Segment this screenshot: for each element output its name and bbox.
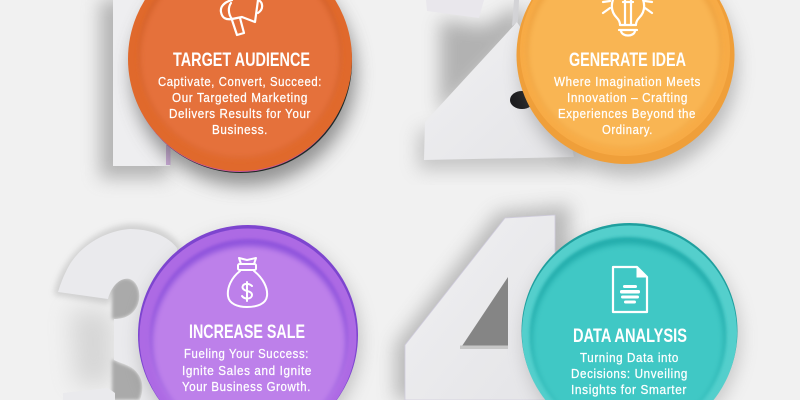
digit 4 (395, 205, 570, 400)
heading: target audience: TARGET AUDIENCE (173, 50, 310, 71)
text: generate idea description: Where Imagination Meets (554, 74, 701, 89)
text: generate idea description: Innovation – Crafting (567, 90, 688, 105)
text: increase sale description: Your Business Growth. (182, 379, 311, 394)
text: generate idea description: Experiences Beyond the (558, 106, 696, 121)
panel: increase sale (138, 225, 360, 400)
digit 3 (54, 224, 182, 400)
text: generate idea description (554, 74, 701, 137)
text: target audience description: Captivate, Convert, Succeed: (158, 74, 322, 89)
text: target audience description: Our Targeted Marketing (172, 90, 308, 105)
icon: document (613, 267, 647, 312)
icon: light bulb (603, 0, 652, 36)
text: target audience description (158, 74, 322, 137)
heading: generate idea: GENERATE IDEA (569, 50, 686, 71)
icon: megaphone (221, 0, 262, 35)
panel: target audience (128, 0, 356, 186)
digit 2 (418, 0, 585, 170)
heading: increase sale: INCREASE SALE (189, 322, 305, 343)
text: increase sale description: Ignite Sales and Ignite (182, 363, 312, 378)
heading: data analysis: DATA ANALYSIS (573, 326, 687, 347)
text: target audience description: Business. (212, 122, 268, 137)
text: target audience description: Delivers Results for Your (169, 106, 311, 121)
icon: money bag (228, 258, 267, 307)
panel: generate idea (516, 0, 737, 176)
text: data analysis description: Decisions: Unveiling (571, 366, 688, 381)
text: data analysis description (571, 350, 688, 397)
digit 1 (100, 0, 170, 178)
panel: data analysis (522, 223, 740, 400)
text: data analysis description: Turning Data into (580, 350, 679, 365)
text: generate idea description: Ordinary. (602, 122, 653, 137)
text: increase sale description (182, 346, 312, 394)
text: data analysis description: Insights for Smarter (571, 382, 687, 397)
text: increase sale description: Fueling Your Success: (184, 346, 309, 361)
